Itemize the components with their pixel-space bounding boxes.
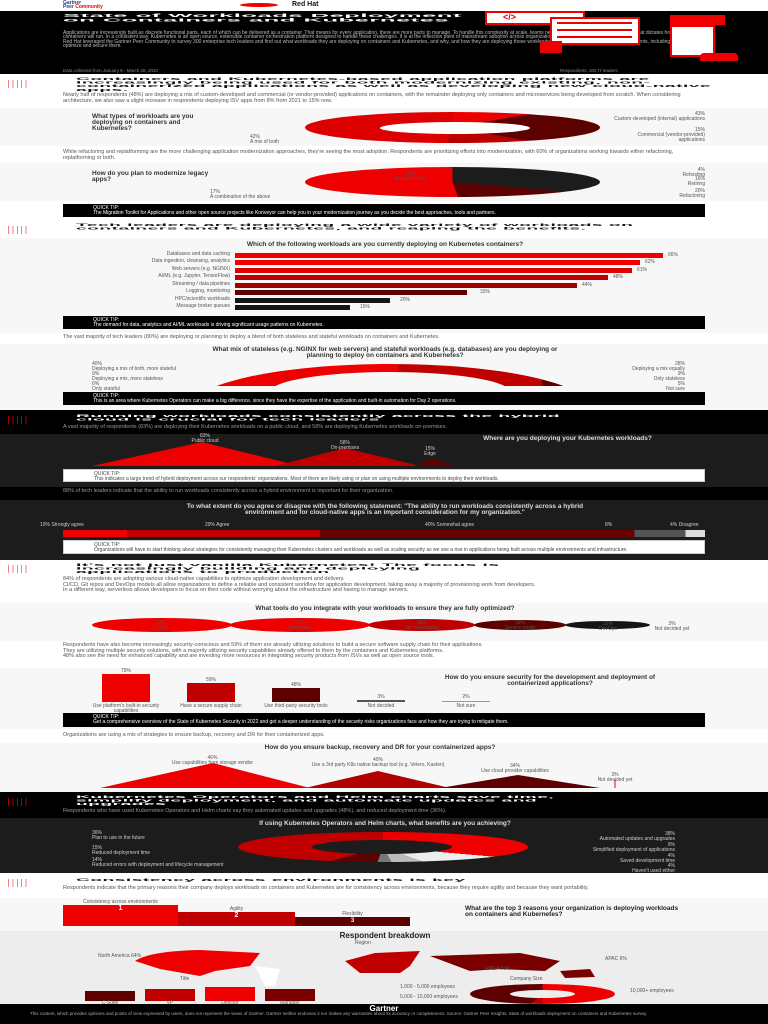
text: consistency: 88% of tech leaders indicate that the ability to run workloads consistently across a hybrid environment is important for their organization. xyxy=(63,488,393,494)
panel: respondent breakdown: VP xyxy=(167,1000,173,1006)
quick tip 3: QUICK TIP: xyxy=(93,393,119,399)
panel: tools ellipses: Service mesh xyxy=(505,625,535,631)
panel: modernize pie: Rehosting xyxy=(682,172,705,178)
panel: workloads bar chart: 20% xyxy=(400,297,410,303)
panel: respondent breakdown: APAC 6% xyxy=(605,956,627,962)
text: backup: Organizations are using a mix of strategies to ensure backup, recovery and DR for their containerized apps. xyxy=(63,732,325,738)
text: refactoring: While refactoring and replatforming are the more challenging application modernization approaches, they're seeing the most adoption. Respondents are prioritizing efforts into modernization, with 60% of organizations working towards either refactoring, replatforming or both. xyxy=(63,149,673,160)
panel: respondent breakdown: Manager xyxy=(280,1000,300,1006)
panel: security bars: How do you ensure security for the development and deployment of containerized applications? xyxy=(445,674,655,687)
quick tip 1: QUICK TIP: xyxy=(93,205,119,211)
panel: stateless gauge: Deploying a mix, more stateless xyxy=(92,376,163,382)
panel: operators donut: Simplified deployment of applications xyxy=(593,847,675,853)
section 4 heading xyxy=(8,563,535,593)
panel: workloads bar chart: 33% xyxy=(480,289,490,295)
panel: respondent breakdown: 5,000 - 10,000 employees xyxy=(400,994,458,1000)
panel: backup triangles: Use capabilities from storage vendor xyxy=(172,760,253,766)
panel: stateless gauge: 28% xyxy=(675,361,685,367)
panel: deployment triangles: 83% xyxy=(200,433,210,439)
panel: backup triangles: How do you ensure backup, recovery and DR for your containerized apps? xyxy=(265,744,495,751)
panel: top reasons xyxy=(0,898,768,931)
panel: stateless gauge: Deploying a mix equally xyxy=(632,366,685,372)
panel: security bars: Not sure xyxy=(457,703,475,709)
panel: stateless gauge xyxy=(0,344,768,410)
panel: backup triangles: 46% xyxy=(207,755,218,761)
header logos: Red Hat xyxy=(292,1,318,8)
panel: modernize pie: 16% xyxy=(695,176,705,182)
title: State of Workloads Deployment on Containers and Kubernetes xyxy=(63,13,462,22)
panel: stateless gauge: 40% xyxy=(92,361,102,367)
panel: modernize pie: A combination of the above xyxy=(210,194,270,200)
panel: modernize pie: 20% xyxy=(695,188,705,194)
panel: security bars: 2% xyxy=(462,694,470,700)
panel: deployment triangles: Public cloud xyxy=(192,438,218,444)
panel: stateless gauge: 6% xyxy=(92,381,99,387)
section 1 heading: Containers and Kubernetes-based application platforms are increasingly being used for both modernizing existing, non-containerized applications as well as developing new cloud-native apps. xyxy=(76,77,711,92)
panel: operators donut: 15% xyxy=(92,845,102,851)
panel: stacked bar: 8% xyxy=(605,522,612,528)
panel: workloads bar chart: 44% xyxy=(582,282,592,288)
panel: security bars: Use platform's built-in security capabilities xyxy=(93,703,159,714)
panel: modernize pie: 4% xyxy=(698,167,705,173)
panel: operators donut: Plan to use in the future xyxy=(92,835,145,841)
panel: tools ellipses: DevOps xyxy=(599,626,617,632)
panel: stacked bar: To what extent do you agree or disagree with the following statement: "The ability to run workloads consistently across a hybrid environment and for cloud-native apps is an important consideration for my organization." xyxy=(187,503,583,516)
panel: stateless gauge: Deploying a mix of both, more stateful xyxy=(92,366,176,372)
panel: top reasons: What are the top 3 reasons your organization is deploying workloads on containers and Kubernetes? xyxy=(465,905,678,918)
panel: operators donut xyxy=(0,818,768,873)
panel: security bars: 3% xyxy=(377,694,385,700)
panel: operators donut: Saved development time xyxy=(620,858,675,864)
panel: stateless gauge: Only stateless xyxy=(654,376,685,382)
panel: modernize pie: How do you plan to modernize legacy apps? xyxy=(92,170,208,183)
section 4 heading: CI/CD, Git repos and DevOps models all allow organizations to define a reliable and consistent workflow for application development, taking away a majority of provisioning work from developers. xyxy=(63,582,535,588)
quick tip 2: QUICK TIP: xyxy=(93,317,119,323)
panel: workload types donut: What types of workloads are you deploying on containers and Kubernetes? xyxy=(92,113,194,132)
panel: top reasons: 1 xyxy=(119,905,122,912)
panel: operators donut: If using Kubernetes Operators and Helm charts, what benefits are you achieving? xyxy=(259,820,511,827)
panel: security bars: 59% xyxy=(206,677,216,683)
quick tip 1: The Migration Toolkit for Applications and other open source projects like Konveyor can help you in your modernization journey as you decide the best approaches, tools and partners. xyxy=(93,210,496,216)
panel: tools ellipses: 3% xyxy=(668,621,676,627)
panel: workload types donut: Custom-developed (internal) applications xyxy=(614,116,705,122)
text: security: They are utilizing multiple security solutions, with a majority utilizing security capabilities already offered to them by the containers and Kubernetes platforms. xyxy=(63,648,444,654)
panel: operators donut: 38% xyxy=(665,831,675,837)
section 3 heading (dark): Running workloads consistently across the hybrid cloud is crucial for tech leaders xyxy=(76,414,560,422)
section 2 heading xyxy=(8,223,633,234)
panel: workload types donut: Commercial (vendor-provided) applications xyxy=(637,132,705,143)
panel: stateless gauge: 5% xyxy=(678,381,685,387)
hero xyxy=(0,11,768,74)
panel: tools ellipses: Git repositories xyxy=(405,625,439,631)
panel: workloads bar chart: Data ingestion, cleansing, analytics xyxy=(152,258,230,264)
quick tip 5 xyxy=(63,540,705,554)
panel: stacked bar: 19% Strongly agree xyxy=(40,522,84,528)
section 6 heading: Consistency across environments is key xyxy=(76,878,466,882)
quick tip 4: This indicates a large trend of hybrid deployment across our respondents' organizations. Most of them are likely using or plan on using multiple environments to deploy their workloads. xyxy=(94,476,499,482)
panel: workloads bar chart: Streaming / data pipelines xyxy=(172,281,230,287)
panel: modernize pie: 17% xyxy=(210,189,220,195)
map xyxy=(135,950,595,986)
intro text xyxy=(63,30,698,49)
panel: backup triangles: Not decided yet xyxy=(598,777,632,783)
section 4 heading: It's not just vanilla Kubernetes! The focus is increasingly building and deploying applications to production xyxy=(76,563,500,574)
panel: modernize pie: Retiring xyxy=(688,181,705,187)
header logos: Peer Community xyxy=(63,4,103,10)
illustration xyxy=(485,11,738,61)
footer: This content, which provides opinions and points of view expressed by users, does not represent the views of Gartner. Gartner neither endorses it nor makes any warranties about its accuracy or completeness. Source: Gartner Peer Insights, State of workloads deployment on containers and Kubernetes survey. xyxy=(30,1011,647,1016)
quick tip 6: QUICK TIP: xyxy=(93,714,119,720)
panel: operators donut: Reduced deployment time xyxy=(92,850,150,856)
section 5 heading (dark): Kubernetes Operators and Helm charts save time, simplify deployment, and automate updates and upgrades xyxy=(76,795,554,806)
section 4 heading: 84% of respondents are adopting various cloud-native capabilities to optimize application development and delivery. xyxy=(63,576,344,582)
panel: backup triangles: 3% xyxy=(611,772,619,778)
panel: deployment triangles: Edge xyxy=(424,451,436,457)
panel: tools ellipses: Not decided yet xyxy=(655,626,689,632)
text: consistency xyxy=(0,487,768,500)
hero: Respondents: 300 IT leaders xyxy=(560,68,618,73)
panel: stacked bar: 40% Somewhat agree xyxy=(425,522,474,528)
panel: stateless gauge: What mix of stateless (e.g. NGINX for web servers) and stateful workloads (e.g. databases) are you deploying or planning to deploy on containers and Kubernetes? xyxy=(213,346,557,359)
header logos: Gartner xyxy=(63,0,81,6)
panel: tools ellipses: 39% xyxy=(515,620,525,626)
text: security: 48% also see the need for enhanced capability and are investing more resources in integrating security products from ISVs as well as open source tools. xyxy=(63,653,434,659)
quick tip 6: Get a comprehensive overview of the State of Kubernetes Security in 2022 and get a deeper understanding of the security risks organizations face and how they are trying to mitigate them. xyxy=(93,719,509,725)
panel: security bars xyxy=(0,668,768,729)
panel: tools ellipses: 55% xyxy=(155,620,165,626)
panel: workload types donut: 43% xyxy=(695,111,705,117)
panel: workloads bar chart: 62% xyxy=(645,259,655,265)
panel: security bars: 48% xyxy=(291,682,301,688)
panel: respondent breakdown: Company Size xyxy=(510,976,543,982)
panel: respondent breakdown: Respondent breakdown xyxy=(340,931,430,940)
panel: respondent breakdown: EMEA 31% xyxy=(485,966,510,972)
quick tip 6 xyxy=(63,713,705,727)
panel: backup triangles: Use a 3rd party K8s native backup tool (e.g. Velero, Kasten) xyxy=(312,762,444,768)
text: security: Respondents have also become increasingly security-conscious and 59% of them are already utilizing solutions to build a secure software supply chain for their applications. xyxy=(63,642,483,648)
panel: respondent breakdown: Director xyxy=(221,1000,239,1006)
panel: tools ellipses xyxy=(0,603,768,641)
panel: backup triangles: Use cloud provider capabilities xyxy=(481,768,549,774)
panel: workloads bar chart: 66% xyxy=(668,252,678,258)
panel: operators donut: 4% xyxy=(668,853,675,859)
panel: deployment triangles xyxy=(0,434,768,487)
quick tip 4: QUICK TIP: xyxy=(94,471,120,477)
quick tip 3 xyxy=(63,392,705,405)
quick tip 5: Organizations will have to start thinking about strategies for consistently managing their Kubernetes clusters and workloads as well as scaling security as we see a rise in applications being built across multiple environments and infrastructure. xyxy=(94,547,628,553)
section 3 heading (dark): A vast majority of respondents (83%) are deploying their Kubernetes workloads on a public cloud, and 58% are deploying Kubernetes workloads on-premises. xyxy=(63,424,447,430)
panel: workloads bar chart: Web servers (e.g. NGINX) xyxy=(172,266,230,272)
panel: stateless gauge: 9% xyxy=(92,371,99,377)
panel: backup triangles: 40% xyxy=(373,757,383,763)
panel: modernize pie: Replatforming xyxy=(394,176,426,182)
panel: top reasons: Agility xyxy=(230,906,243,912)
panel: respondent breakdown: North America 64% xyxy=(98,953,141,959)
panel: stateless gauge: Not sure xyxy=(666,386,685,392)
section 3 heading (dark) xyxy=(0,410,768,434)
quick tip 4 xyxy=(63,469,705,482)
intro text: Red Hat leveraged the Gartner Peer Community to survey 300 enterprise tech leaders and find out what workloads they are deploying on containers and Kubernetes, and why, and how they are deploying those workloads across hybrid and multi-cloud environments, including how to optimize and secure them. xyxy=(63,39,686,49)
panel: tools ellipses: What tools do you integrate with your workloads to ensure they are fully optimized? xyxy=(255,605,515,612)
panel: backup triangles: 34% xyxy=(510,763,520,769)
quick tip 2: The demand for data, analytics and AI/ML workloads is driving significant usage patterns on Kubernetes. xyxy=(93,322,324,328)
panel: respondent breakdown: Title xyxy=(180,976,189,982)
panel: workload types donut: A mix of both xyxy=(250,139,279,145)
intro text: Applications are increasingly built as discrete functional parts, each of which can be delivered as a container. That means for every application, there are more parts to manage. To handle this complexity at scale, teams need a policy-driven, automated solution that dictates how and where containers will run. In a consistent way, Kubernetes is an open source, extensible container orchestration platform designed to handle these challenges. It is at the inflection point of mainstream adoption across organizations globally. xyxy=(63,30,698,40)
panel: security bars: Have a secure supply chain xyxy=(180,703,242,709)
panel: stacked bar: 29% Agree xyxy=(205,522,229,528)
panel: workload types donut: 15% xyxy=(695,127,705,133)
panel: deployment triangles: Where are you deploying your Kubernetes workloads? xyxy=(483,435,652,442)
panel: stateless gauge: 9% xyxy=(678,371,685,377)
panel: workloads bar chart: 15% xyxy=(360,304,370,310)
section 1 heading: Nearly half of respondents (48%) are deploying a mix of custom-developed and commercial (or vendor-provided) applications on containers, with the remainder deploying only containers and microservices being developed from scratch. When considering architecture, we also saw a slight increase in respondents deploying ISV apps from 8% from 2021 to 15% now. xyxy=(63,92,681,104)
panel: deployment triangles: On-premises xyxy=(331,445,359,451)
panel: respondent breakdown xyxy=(0,931,768,1004)
quick tip 5: QUICK TIP: xyxy=(94,542,120,548)
panel: tools ellipses: CI/CD xyxy=(153,625,167,631)
panel: respondent breakdown: 10,000+ employees xyxy=(630,988,674,994)
panel: stacked bar xyxy=(0,500,768,560)
panel: modernize pie: Refactoring xyxy=(679,193,705,199)
panel: top reasons: 2 xyxy=(235,912,238,919)
section 5 heading (dark) xyxy=(0,792,768,818)
panel: deployment triangles: 15% xyxy=(425,446,435,452)
footer xyxy=(0,1004,768,1024)
panel: top reasons: Flexibility xyxy=(342,911,363,917)
panel: security bars: 79% xyxy=(121,668,131,674)
hero: Data collected from January 8 - March 28, 2022 xyxy=(63,68,158,73)
text: stateless: The vast majority of tech leaders (80%) are deploying or planning to deploy a blend of both stateless and stateful workloads on containers and Kubernetes. xyxy=(63,334,440,340)
panel: workloads bar chart xyxy=(0,238,768,333)
footer: Gartner xyxy=(370,1004,398,1013)
panel: workload types donut: 42% xyxy=(250,134,260,140)
panel: workloads bar chart: AI/ML (e.g. Jupyter, TensorFlow) xyxy=(158,273,230,279)
panel: backup triangles xyxy=(0,743,768,792)
panel: stateless gauge: Only stateful xyxy=(92,386,120,392)
panel: respondent breakdown: C-Suite xyxy=(102,1000,118,1006)
panel: security bars: Use third-party security tools xyxy=(264,703,328,709)
section 5 heading (dark): Respondents who have used Kubernetes Operators and Helm charts say they automated updates and upgrades (48%), and reduced deployment time (36%). xyxy=(63,808,446,814)
panel: deployment triangles: 58% xyxy=(340,440,350,446)
section 6 heading: Respondents indicate that the primary reasons their company deploys workloads on containers and Kubernetes are for consistency across environments, because they require agility and because they want portability. xyxy=(63,885,589,891)
panel: modernize pie: 43% xyxy=(405,171,415,177)
panel: top reasons: Consistency across environments xyxy=(83,899,158,905)
panel: tools ellipses: Serverless xyxy=(288,625,312,631)
panel: operators donut: 14% xyxy=(92,857,102,863)
panel: workloads bar chart: HPC/scientific workloads xyxy=(175,296,230,302)
section 2 heading: Tech leaders are deploying a wide variety of workloads on containers and Kubernetes, and reaping the benefits. xyxy=(76,223,633,230)
panel: operators donut: Haven't used either xyxy=(632,868,675,874)
panel: workloads bar chart: Message broker queues xyxy=(176,303,230,309)
panel: tools ellipses: 53% xyxy=(295,620,305,626)
panel: operators donut: Reduced errors with deployment and lifecycle management xyxy=(92,862,223,868)
panel: operators donut: Automated updates and upgrades xyxy=(600,836,675,842)
panel: top reasons: 3 xyxy=(351,918,354,924)
section 6 heading xyxy=(8,878,589,891)
quick tip 2 xyxy=(63,316,705,329)
panel: operators donut: 36% xyxy=(92,830,102,836)
panel: modernize pie xyxy=(0,163,768,201)
illustration: </> xyxy=(503,12,516,22)
panel: security bars: Not decided xyxy=(368,703,394,709)
panel: respondent breakdown: Region xyxy=(355,940,371,946)
panel: workloads bar chart: Logging, monitoring xyxy=(186,288,230,294)
header logos xyxy=(0,0,768,11)
panel: tools ellipses: 43% xyxy=(417,620,427,626)
panel: tools ellipses: 32% xyxy=(603,621,613,627)
text: security xyxy=(63,642,483,659)
panel: workloads bar chart: 61% xyxy=(637,267,647,273)
quick tip 1 xyxy=(63,204,705,217)
panel: workloads bar chart: Which of the following workloads are you currently deploying on Kubernetes containers? xyxy=(247,241,523,248)
panel: operators donut: 4% xyxy=(668,863,675,869)
panel: respondent breakdown: 1,000 - 5,000 employees xyxy=(400,984,455,990)
panel: stacked bar: 4% Disagree xyxy=(670,522,699,528)
section 1 heading xyxy=(8,77,711,104)
panel: operators donut: 9% xyxy=(668,842,675,848)
panel: workloads bar chart: 48% xyxy=(613,274,623,280)
panel: workload types donut xyxy=(0,108,768,146)
quick tip 3: This is an area where Kubernetes Operators can make a big difference, since they have the expertise of the application and built-in automation for Day 2 operations. xyxy=(93,398,456,404)
panel: workloads bar chart: Databases and data caching xyxy=(167,251,230,257)
section 4 heading: In a different way, serverless allows developers to focus on their code without worrying about the infrastructure and having to manage servers. xyxy=(63,587,408,593)
